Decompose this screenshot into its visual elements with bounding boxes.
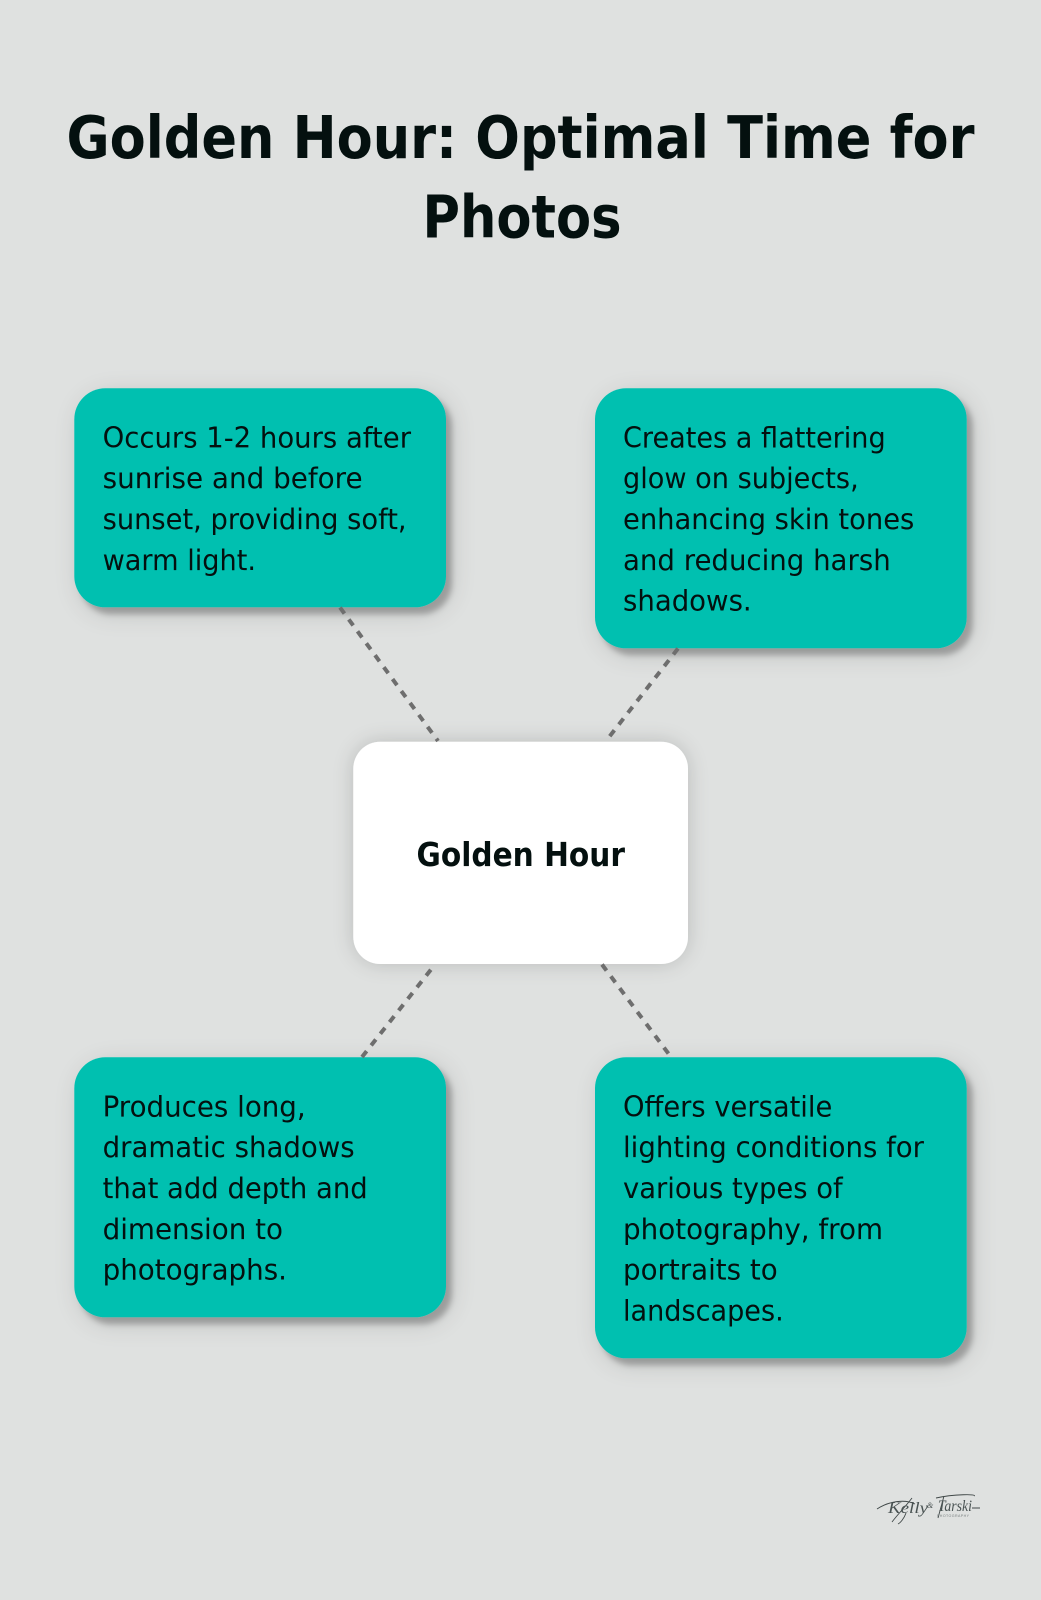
panel: long shadows card (74, 1057, 446, 1317)
panel: long shadows card: dimension to (103, 1213, 283, 1246)
panel: flattering glow card: Creates a flattering (623, 421, 886, 454)
panel: long shadows card: Produces long, (103, 1090, 306, 1123)
panel: center node (353, 742, 688, 964)
panel: flattering glow card: shadows. (623, 585, 752, 618)
panel: versatile lighting card: portraits to (623, 1254, 778, 1287)
panel: versatile lighting card: Offers versatile (623, 1090, 832, 1123)
panel: long shadows card: dramatic shadows (103, 1131, 355, 1164)
dashed connectors (340, 608, 678, 1057)
panel: flattering glow card: glow on subjects, (623, 462, 859, 495)
logo: signature: Tarski (938, 1498, 972, 1515)
panel: timing card: warm light. (103, 544, 256, 577)
title (66, 104, 975, 252)
panel: flattering glow card (595, 388, 967, 648)
title: Photos (422, 184, 622, 252)
panel: versatile lighting card: various types of (623, 1172, 844, 1205)
panel: timing card: sunset, providing soft, (103, 503, 407, 536)
logo: signature: Kelly (887, 1500, 929, 1517)
panel: timing card: Occurs 1-2 hours after (103, 421, 411, 454)
panel: center node: Golden Hour (416, 836, 625, 874)
logo: signature: & (927, 1501, 934, 1510)
panel: timing card (74, 388, 446, 607)
panel: flattering glow card: enhancing skin tones (623, 503, 914, 536)
panel: versatile lighting card: photography, from (623, 1213, 883, 1246)
panel: versatile lighting card (595, 1057, 967, 1358)
logo: signature: PHOTOGRAPHY (937, 1514, 970, 1518)
panel: long shadows card: photographs. (103, 1254, 287, 1287)
panel: versatile lighting card: landscapes. (623, 1294, 784, 1327)
logo: signature (877, 1495, 980, 1524)
panel: timing card: sunrise and before (103, 462, 363, 495)
panel: long shadows card: that add depth and (103, 1172, 368, 1205)
panel: flattering glow card: and reducing harsh (623, 544, 891, 577)
panel: versatile lighting card: lighting conditions for (623, 1131, 924, 1164)
